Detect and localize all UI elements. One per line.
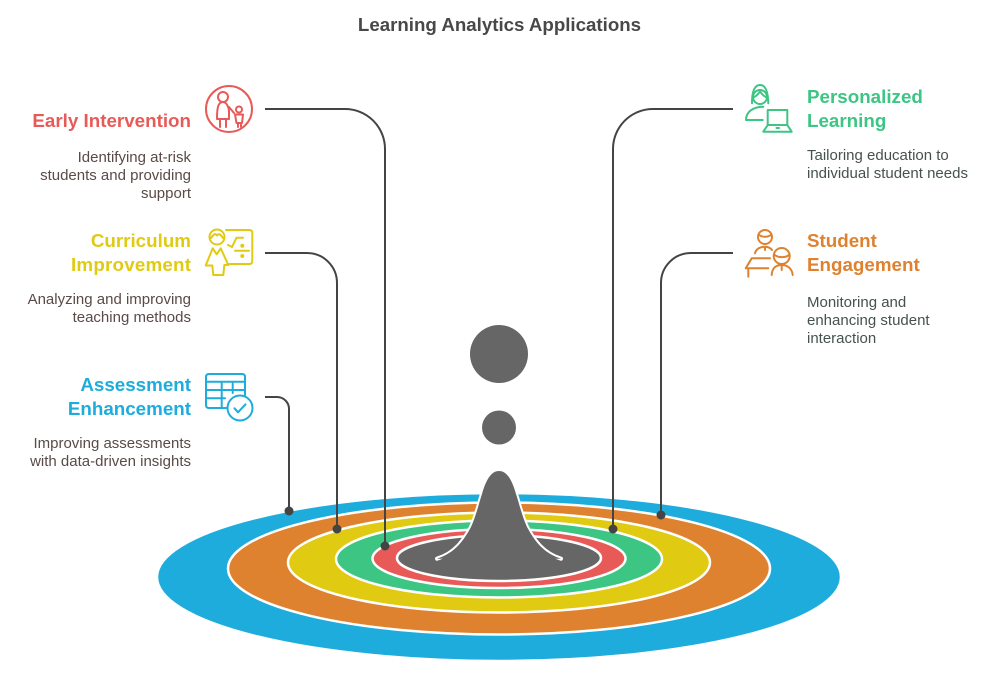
block: assessment enhancement: Assessment <box>80 374 192 395</box>
block: student engagement: Monitoring and <box>807 294 906 311</box>
block: student engagement: Student <box>807 230 878 251</box>
block: curriculum improvement: Curriculum <box>91 230 191 251</box>
connector: student engagement <box>658 253 733 518</box>
block: assessment enhancement: with data-driven insights <box>29 453 191 470</box>
block: personalized learning <box>807 86 968 182</box>
block: student engagement: enhancing student <box>807 312 930 329</box>
block: curriculum improvement: Analyzing and improving <box>28 291 191 308</box>
floating drop: small <box>482 410 516 444</box>
connector: curriculum improvement <box>265 253 340 532</box>
icon: table with check <box>206 374 252 420</box>
block: early intervention: Early Intervention <box>32 110 191 131</box>
connector: assessment enhancement <box>265 397 292 514</box>
block: curriculum improvement: teaching methods <box>73 309 191 326</box>
concentric ripple chart <box>157 471 841 661</box>
block: personalized learning: individual student needs <box>807 165 968 182</box>
icon: student at desk <box>746 230 793 277</box>
block: early intervention: Identifying at-risk <box>78 149 191 166</box>
icon: adult and child <box>206 86 252 132</box>
block: assessment enhancement: Improving assessments <box>33 435 191 452</box>
block: early intervention <box>32 110 192 202</box>
icon: teacher at board <box>206 230 252 275</box>
block: personalized learning: Personalized <box>807 86 923 107</box>
title: Learning Analytics Applications <box>358 14 641 35</box>
block: assessment enhancement <box>29 374 192 470</box>
block: student engagement <box>807 230 930 347</box>
block: curriculum improvement: Improvement <box>71 254 192 275</box>
block: personalized learning: Tailoring education to <box>807 147 949 164</box>
block: student engagement: interaction <box>807 330 876 347</box>
floating drop: large <box>470 325 528 383</box>
block: early intervention: students and providing <box>40 167 191 184</box>
block: early intervention: support <box>141 185 192 202</box>
block: curriculum improvement <box>28 230 192 326</box>
connector: early intervention <box>265 109 388 550</box>
icon: student with laptop <box>746 85 792 132</box>
connector: personalized learning <box>610 109 733 532</box>
block: student engagement: Engagement <box>807 254 920 275</box>
peak <box>437 471 561 559</box>
block: personalized learning: Learning <box>807 110 886 131</box>
block: assessment enhancement: Enhancement <box>68 398 192 419</box>
